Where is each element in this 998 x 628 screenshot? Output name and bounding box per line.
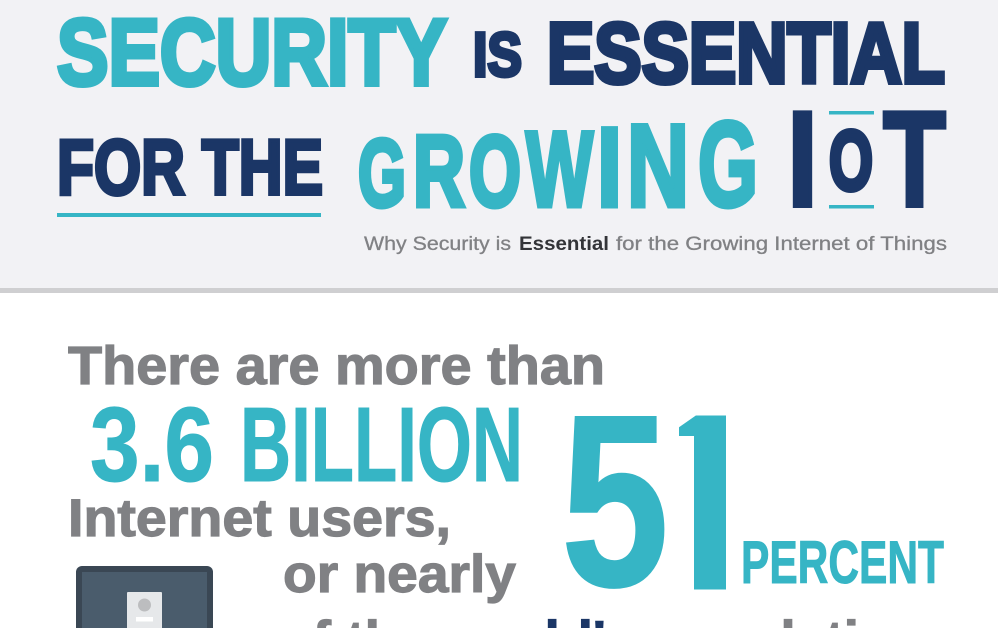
title word: IoT [787, 83, 946, 235]
text: Internet users,: Internet users, [68, 489, 451, 548]
title [57, 0, 946, 235]
underline beneath FOR THE [57, 213, 321, 217]
title words: FOR THE: FOR THE [57, 123, 323, 211]
number: 3.6: 3.6 [90, 386, 214, 504]
title word: IoT: T [883, 83, 946, 235]
title word: GROWING, letters rising left to right: G [698, 96, 758, 232]
title word: IS: IS [473, 21, 522, 90]
text: There are more than: There are more than [68, 336, 605, 396]
title word: GROWING, letters rising left to right: G [358, 120, 406, 227]
subtitle: for the Growing Internet of Things [616, 234, 947, 255]
label: BILLION: BILLION [240, 386, 523, 504]
title word: IoT: O [829, 114, 873, 208]
subtitle [364, 234, 947, 255]
number: 51 [566, 416, 726, 590]
title word: GROWING, letters rising left to right: O [469, 116, 521, 228]
title word: GROWING, letters rising left to right: N [627, 100, 689, 231]
title word: GROWING, letters rising left to right: R [413, 116, 465, 228]
title word: GROWING, letters rising left to right: I [597, 105, 622, 230]
text: of the world's population, cropped by the bottom edge [279, 609, 925, 628]
subtitle: Essential [519, 234, 609, 255]
title word: IoT: I [787, 83, 818, 235]
statistic text block [68, 336, 944, 628]
subtitle: Why Security is [364, 234, 511, 255]
title word: GROWING, letters rising left to right: W [526, 109, 593, 229]
text: or nearly: or nearly [283, 545, 517, 604]
title word: GROWING, letters rising left to right [358, 96, 758, 232]
header panel [0, 0, 998, 293]
title word: SECURITY: SECURITY [57, 0, 447, 104]
icon: computer monitor with ID document [76, 566, 213, 628]
